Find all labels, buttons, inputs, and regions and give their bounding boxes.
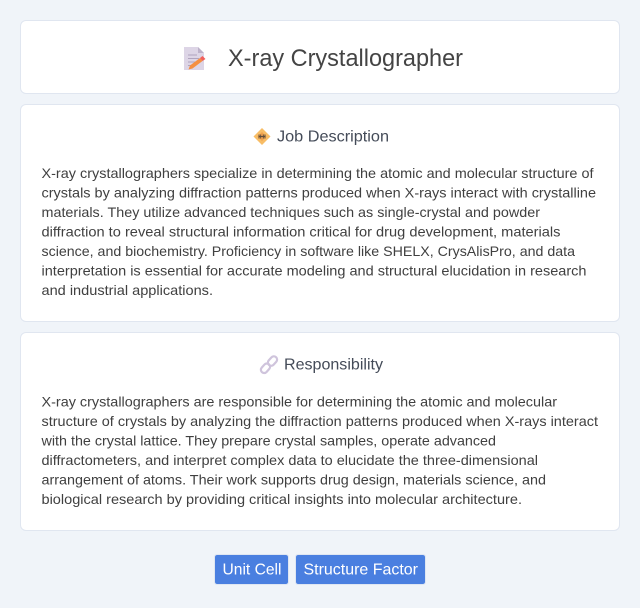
text block: job description	[42, 165, 596, 298]
panel: title card	[20, 20, 620, 94]
text block: responsibility: biological research by providing critical insights into molecular architecture.	[42, 491, 522, 507]
tag: Unit Cell	[215, 555, 288, 584]
icon: diamond sign	[254, 128, 270, 145]
text block: responsibility	[40, 394, 598, 507]
panel: responsibility	[20, 332, 620, 531]
icon: chain link	[260, 355, 278, 374]
icon: document with pencil	[184, 47, 206, 70]
title: X-ray Crystallographer	[228, 45, 463, 72]
text block: responsibility: diffractometers, and interpret complex data to elucidate the three-dimensional	[42, 452, 538, 468]
text block: job description: science, and biochemistry. Proficiency in software like SHELX, CrysAlisPro, and data	[42, 243, 575, 259]
text block: job description: materials. They utilize advanced techniques such as single-crystal and powder	[42, 204, 540, 220]
text block: responsibility: with the crystal lattice. They prepare crystal samples, operate advanced	[40, 433, 496, 449]
text block: job description: and industrial applications.	[42, 282, 213, 298]
text block: job description: diffraction to reveal structural information critical for drug development, materials	[42, 224, 560, 240]
text block: job description: interpretation is essential for accurate modeling and structural elucidation in research	[42, 263, 586, 279]
text block: responsibility: structure of crystals by analyzing the diffraction patterns produced when X-rays interact	[42, 413, 598, 429]
tag: Structure Factor: Structure Factor	[304, 562, 419, 578]
text block: job description: X-ray crystallographers specialize in determining the atomic and molecular structure of	[42, 165, 594, 181]
tag: Structure Factor	[296, 555, 425, 584]
panel: job description	[20, 104, 620, 322]
text block: responsibility: arrangement of atoms. Their work supports drug design, materials science, and	[42, 472, 546, 488]
text block: responsibility: X-ray crystallographers are responsible for determining the atomic and molecular	[42, 394, 557, 410]
tag: Unit Cell: Unit Cell	[222, 562, 282, 578]
heading: job description: Job Description	[277, 128, 389, 146]
text block: job description: crystals by analyzing diffraction patterns produced when X-rays interact with crystalline	[42, 185, 596, 201]
heading: responsibility: Responsibility	[284, 356, 383, 374]
